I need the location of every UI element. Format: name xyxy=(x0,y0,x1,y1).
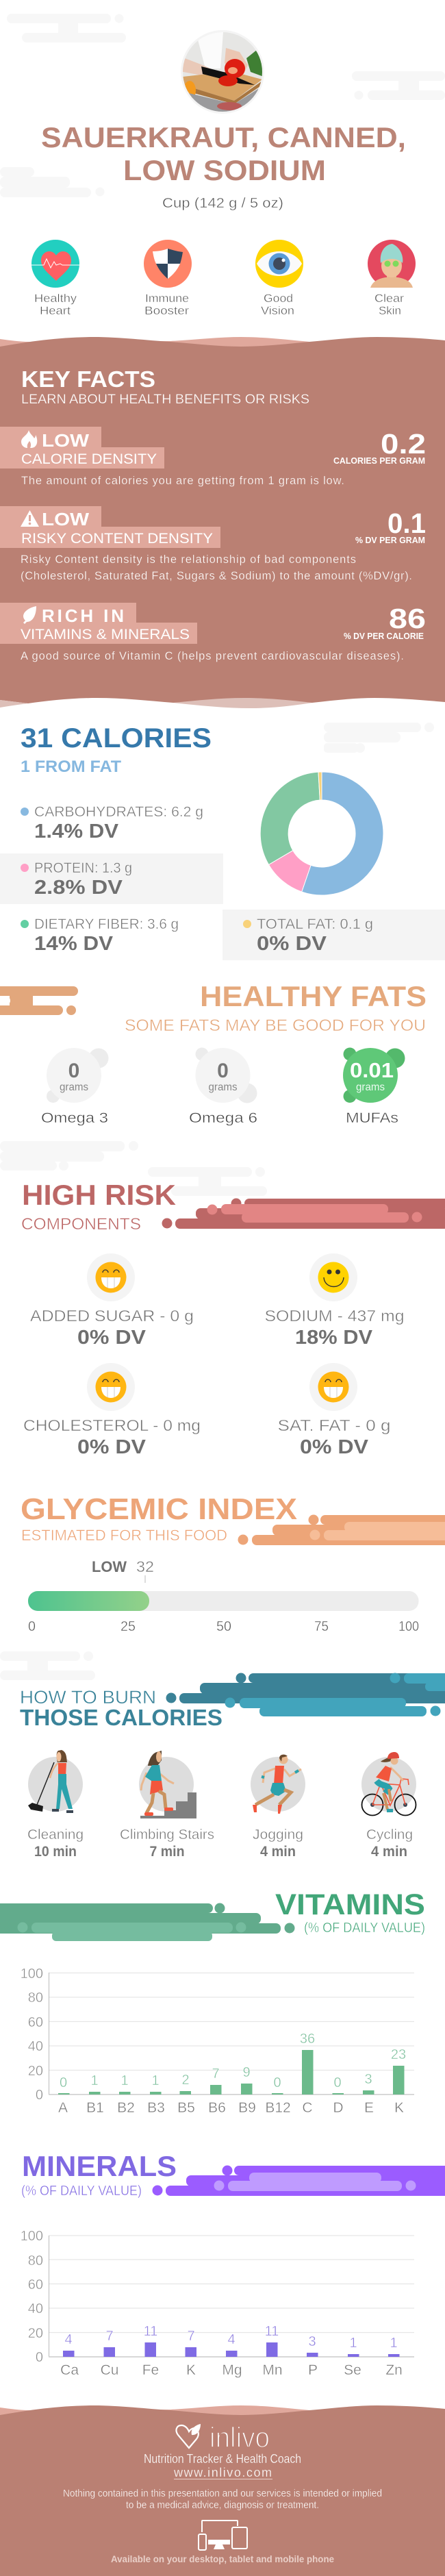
bar chart: vitamins: 0 xyxy=(273,2075,281,2090)
bar chart: vitamins: K xyxy=(394,2100,404,2116)
stat: omega 3: grams xyxy=(60,1081,88,1093)
activity: cleaning: Cleaning xyxy=(27,1827,84,1842)
fact: low calorie density: 0.2 xyxy=(381,428,426,460)
legend: carbohydrates: CARBOHYDRATES: 6.2 g xyxy=(34,804,203,820)
activity: jogging: 4 min xyxy=(260,1844,296,1860)
bar chart: vitamins: B3 xyxy=(147,2100,165,2116)
risk: saturated fat: 0% DV xyxy=(300,1436,369,1458)
heading: healthy fats: SOME FATS MAY BE GOOD FOR YOU xyxy=(125,1016,426,1035)
title: LOW SODIUM xyxy=(123,154,326,186)
gauge value: low 32: LOW xyxy=(92,1558,127,1575)
fact: rich in vitamins and minerals: RICH IN xyxy=(42,605,124,626)
bar chart: minerals: 80 xyxy=(28,2253,43,2268)
bar chart: minerals: 0 xyxy=(36,2350,43,2365)
bar chart: minerals: 1 xyxy=(390,2336,398,2351)
fact: low risky content density: 0.1 xyxy=(387,508,426,539)
heading: minerals xyxy=(21,2150,177,2199)
risk: added sugar: 0% DV xyxy=(77,1327,147,1349)
bar chart: vitamins: B5 xyxy=(177,2100,195,2116)
icon: good vision eye xyxy=(255,240,303,288)
bar chart: minerals: 4 xyxy=(64,2332,73,2347)
stat: MUFAs: MUFAs xyxy=(346,1110,398,1126)
bar chart: minerals: Mg xyxy=(222,2362,242,2378)
icon: devices xyxy=(199,2521,247,2550)
title: SAUERKRAUT, CANNED, xyxy=(41,121,406,153)
bar chart: vitamins: B12 xyxy=(265,2100,291,2116)
bar chart: vitamins: 36 xyxy=(300,2031,315,2047)
gauge value: low 32: 32 xyxy=(136,1558,154,1575)
fact: low calorie density: CALORIES PER GRAM xyxy=(333,455,425,466)
logo: inlivo: inlivo xyxy=(209,2421,270,2453)
fact: rich in vitamins and minerals: 86 xyxy=(389,603,426,634)
heading: healthy fats: HEALTHY FATS xyxy=(200,980,427,1012)
panel: calories and macronutrients xyxy=(0,723,445,960)
gauge bar xyxy=(28,1591,419,1611)
banner: glycemic index xyxy=(238,1515,445,1545)
legend: dietary fiber: DIETARY FIBER: 3.6 g xyxy=(34,916,179,932)
label: immune booster: Immune xyxy=(145,292,189,305)
heading: calories: 1 FROM FAT xyxy=(21,758,121,776)
heading: glycemic index: ESTIMATED FOR THIS FOOD xyxy=(21,1527,227,1544)
legend: total fat xyxy=(222,910,445,960)
heading: how to burn xyxy=(20,1687,222,1730)
bar chart: vitamins: 0 xyxy=(60,2075,67,2090)
fact: low calorie density: CALORIE DENSITY xyxy=(21,451,157,467)
bar chart: minerals: 7 xyxy=(105,2329,114,2344)
fact: rich in vitamins and minerals: A good source of Vitamin C (helps prevent cardiovascular diseases). xyxy=(21,650,404,662)
bar chart: vitamins: 1 xyxy=(120,2073,129,2088)
bar chart: minerals: 4 xyxy=(227,2332,236,2347)
heading: glycemic index: GLYCEMIC INDEX xyxy=(21,1492,297,1526)
bar chart: vitamins: 100 xyxy=(21,1966,43,1981)
gauge scale: 0 xyxy=(28,1619,36,1634)
icon: clear skin face mask xyxy=(368,240,416,288)
bar chart: minerals: 11 xyxy=(144,2324,157,2339)
label: healthy heart xyxy=(34,292,77,317)
bar chart: minerals: 100 xyxy=(21,2229,43,2244)
banner: burn calories xyxy=(166,1673,445,1716)
stat: omega 6: 0 xyxy=(217,1060,229,1082)
label: clear skin: Clear xyxy=(374,292,404,305)
bar chart: minerals: 1 xyxy=(349,2336,357,2351)
fact: low risky content density xyxy=(0,506,426,582)
stat: omega 3: Omega 3 xyxy=(41,1110,108,1126)
fact: low risky content density: LOW xyxy=(42,509,90,529)
banner: healthy fats xyxy=(0,986,78,1015)
stat: omega 3: 0 xyxy=(68,1060,79,1082)
stat: omega 6 xyxy=(189,1048,257,1126)
label: healthy heart: Healthy xyxy=(34,292,77,305)
risk: added sugar: ADDED SUGAR - 0 g xyxy=(30,1307,194,1325)
heading: glycemic index xyxy=(21,1492,297,1544)
bar chart: minerals: 60 xyxy=(28,2277,43,2292)
icon: immune booster shield xyxy=(144,240,192,288)
gauge scale: 25 xyxy=(120,1619,136,1634)
legend: dietary fiber: 14% DV xyxy=(34,933,114,955)
heading: key facts: KEY FACTS xyxy=(21,366,155,392)
activity: jogging xyxy=(251,1755,305,1860)
label: good vision: Good xyxy=(264,292,293,305)
gauge scale: 75 xyxy=(314,1619,329,1634)
bar chart: vitamins: B6 xyxy=(208,2100,226,2116)
risk: added sugar xyxy=(30,1253,194,1349)
donut chart: macronutrient split xyxy=(260,772,383,895)
bar chart: vitamins: 20 xyxy=(28,2064,43,2079)
bar chart: minerals: 40 xyxy=(28,2301,43,2316)
risk: sodium xyxy=(264,1253,404,1349)
activity: climbing stairs: 7 min xyxy=(149,1844,185,1860)
panel: healthy fats xyxy=(0,980,427,1126)
title xyxy=(41,121,406,186)
risk: saturated fat xyxy=(278,1363,390,1458)
heading: high risk: HIGH RISK xyxy=(22,1179,176,1211)
gauge scale xyxy=(28,1619,419,1634)
bar chart: vitamins: 0 xyxy=(333,2075,342,2090)
panel: vitamins xyxy=(0,1888,425,2116)
heading: minerals: MINERALS xyxy=(22,2150,177,2182)
banner: minerals xyxy=(152,2166,445,2196)
bar chart: vitamins: 9 xyxy=(242,2065,251,2080)
bar chart: vitamins: 1 xyxy=(90,2073,99,2088)
panel: how to burn those calories xyxy=(20,1673,445,1860)
fact: rich in vitamins and minerals: % DV PER CALORIE xyxy=(344,631,424,641)
bar chart: minerals: 3 xyxy=(308,2334,316,2349)
heading: high risk: COMPONENTS xyxy=(21,1215,141,1234)
bar chart: minerals xyxy=(21,2229,414,2378)
heading: high risk xyxy=(21,1179,176,1234)
disclaimer xyxy=(63,2488,382,2511)
activity: cleaning: 10 min xyxy=(34,1844,77,1860)
activity: jogging: Jogging xyxy=(253,1827,303,1842)
bar chart: vitamins: 40 xyxy=(28,2039,43,2054)
bar chart: vitamins: 80 xyxy=(28,1990,43,2005)
fact: rich in vitamins and minerals xyxy=(0,603,426,662)
fact: low risky content density: % DV PER GRAM xyxy=(355,535,425,545)
gauge value: low 32 xyxy=(92,1558,154,1583)
bar chart: vitamins: B1 xyxy=(86,2100,104,2116)
label: good vision xyxy=(261,292,294,317)
icon: flame xyxy=(21,430,37,448)
disclaimer: Nothing contained in this presentation and our services is intended or implied xyxy=(63,2488,382,2499)
activity: cycling: Cycling xyxy=(366,1827,413,1842)
fact: low calorie density: The amount of calories you are getting from 1 gram is low. xyxy=(21,475,344,487)
bar chart: minerals: 7 xyxy=(187,2329,195,2344)
heading: calories: 31 CALORIES xyxy=(21,723,212,753)
disclaimer: to be a medical advice, diagnosis or treatment. xyxy=(126,2500,319,2511)
label: immune booster xyxy=(144,292,189,317)
header photo: hands slicing a red pepper xyxy=(179,30,264,114)
panel: high risk components xyxy=(21,1179,445,1458)
banner: vitamins xyxy=(0,1903,294,1941)
icon: healthy heart xyxy=(31,240,79,288)
heading: how to burn: THOSE CALORIES xyxy=(20,1705,222,1730)
bar chart: vitamins: 1 xyxy=(151,2073,160,2088)
heading: healthy fats xyxy=(125,980,427,1035)
legend: protein: 2.8% DV xyxy=(34,877,123,899)
stat: MUFAs: 0.01 xyxy=(350,1058,394,1082)
bar chart: vitamins: 23 xyxy=(391,2047,406,2062)
logo: inlivo xyxy=(177,2421,270,2453)
bar chart: vitamins: 7 xyxy=(212,2066,220,2081)
bar chart: vitamins: C xyxy=(302,2100,313,2116)
bar chart: vitamins: 0 xyxy=(36,2088,43,2103)
activity: cycling: 4 min xyxy=(371,1844,407,1860)
heading: key facts: LEARN ABOUT HEALTH BENEFITS OR RISKS xyxy=(21,392,309,407)
risk: cholesterol: 0% DV xyxy=(77,1436,147,1458)
risk: cholesterol xyxy=(23,1363,201,1458)
fact: low risky content density: RISKY CONTENT DENSITY xyxy=(21,531,213,547)
risk: saturated fat: SAT. FAT - 0 g xyxy=(278,1416,390,1434)
legend: carbohydrates: 1.4% DV xyxy=(34,821,119,842)
legend: total fat: 0% DV xyxy=(257,933,327,955)
bar chart: vitamins: 3 xyxy=(364,2072,372,2087)
bar chart: minerals: Cu xyxy=(101,2362,118,2378)
heading: calories xyxy=(21,723,212,776)
bar chart: minerals: K xyxy=(186,2362,196,2378)
risk: sodium: SODIUM - 437 mg xyxy=(264,1307,404,1325)
activity: climbing stairs xyxy=(120,1751,214,1860)
legend: protein xyxy=(0,853,223,904)
bar chart: minerals: P xyxy=(308,2362,318,2378)
stat: MUFAs: grams xyxy=(356,1081,385,1093)
stat: omega 6: Omega 6 xyxy=(189,1110,257,1126)
fact: low risky content density: Risky Content density is the relationship of bad components xyxy=(21,553,356,566)
bar chart: minerals: Fe xyxy=(142,2362,159,2378)
stat: omega 6: grams xyxy=(208,1081,237,1093)
label: immune booster: Booster xyxy=(144,304,189,317)
label: clear skin: Skin xyxy=(379,304,401,317)
bar chart: vitamins: D xyxy=(333,2100,344,2116)
risk: cholesterol: CHOLESTEROL - 0 mg xyxy=(23,1416,201,1434)
footer tagline and link: www.inlivo.com xyxy=(173,2466,272,2479)
bar chart: minerals: Mn xyxy=(262,2362,283,2378)
bar chart: minerals: 11 xyxy=(265,2324,279,2339)
heading: how to burn: HOW TO BURN xyxy=(20,1687,156,1708)
heading: key facts xyxy=(21,366,309,407)
legend: total fat: TOTAL FAT: 0.1 g xyxy=(257,916,373,932)
label: good vision: Vision xyxy=(261,304,294,317)
stat: omega 3 xyxy=(41,1048,108,1126)
gauge scale: 50 xyxy=(216,1619,231,1634)
serving size: Cup (142 g / 5 oz) xyxy=(162,196,283,211)
legend: dietary fiber xyxy=(21,916,179,955)
bar chart: vitamins: E xyxy=(364,2100,374,2116)
heading: vitamins: (% OF DAILY VALUE) xyxy=(304,1921,425,1936)
fact: low calorie density: LOW xyxy=(42,430,90,451)
risk: sodium: 18% DV xyxy=(295,1327,373,1349)
fact: rich in vitamins and minerals: VITAMINS & MINERALS xyxy=(21,627,190,642)
bar chart: vitamins: B2 xyxy=(117,2100,135,2116)
footer tagline and link xyxy=(144,2452,301,2479)
panel: key facts xyxy=(0,337,445,708)
bar chart: vitamins xyxy=(21,1966,414,2116)
fact: low risky content density: (Cholesterol, Saturated Fat, Sugars & Sodium) to the amount (%DV/gr). xyxy=(21,570,412,582)
activity: cycling xyxy=(361,1752,416,1860)
footer tagline and link: Nutrition Tracker & Health Coach xyxy=(144,2452,301,2466)
bar chart: vitamins: B9 xyxy=(238,2100,256,2116)
gauge scale: 100 xyxy=(398,1619,419,1634)
icon: warning triangle xyxy=(21,510,39,527)
bar chart: vitamins: 2 xyxy=(181,2073,190,2088)
banner: high risk xyxy=(162,1199,445,1229)
panel: glycemic index xyxy=(21,1492,445,1634)
legend: carbohydrates xyxy=(21,804,203,842)
heading: vitamins: VITAMINS xyxy=(275,1888,425,1921)
availability note: Available on your desktop, tablet and mobile phone xyxy=(111,2553,334,2564)
bar chart: minerals: Zn xyxy=(385,2362,403,2378)
activity: climbing stairs: Climbing Stairs xyxy=(120,1827,214,1842)
activity: cleaning xyxy=(27,1750,84,1860)
bar chart: minerals: 20 xyxy=(28,2326,43,2341)
label: healthy heart: Heart xyxy=(40,304,71,317)
panel: minerals xyxy=(21,2150,445,2378)
heading: minerals: (% OF DAILY VALUE) xyxy=(21,2184,142,2199)
bar chart: minerals: Ca xyxy=(60,2362,79,2378)
bar chart: vitamins: 60 xyxy=(28,2015,43,2030)
label: clear skin xyxy=(374,292,404,317)
bar chart: vitamins: A xyxy=(58,2100,68,2116)
health benefits row xyxy=(31,240,416,317)
legend: protein: PROTEIN: 1.3 g xyxy=(34,860,132,876)
fact: low calorie density xyxy=(0,427,426,487)
panel: footer xyxy=(0,2405,445,2576)
heading: vitamins xyxy=(275,1888,425,1936)
stat: MUFAs xyxy=(343,1048,405,1126)
icon: leaf xyxy=(23,606,36,624)
bar chart: minerals: Se xyxy=(344,2362,361,2378)
